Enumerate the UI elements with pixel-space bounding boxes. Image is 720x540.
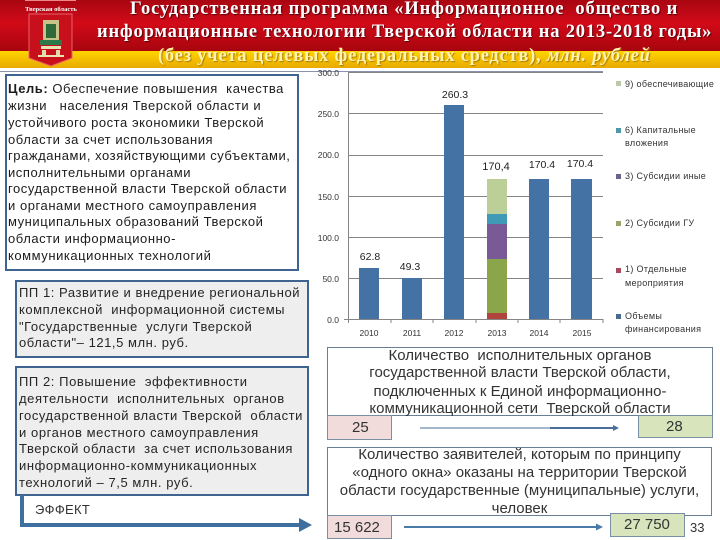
data labels: 260.3: [442, 89, 468, 101]
panel: subprogram 2: и органов местного самоуправления: [19, 425, 259, 440]
chart legend: 9) обеспечивающие: [625, 79, 714, 89]
panel: subprogram 2: Тверской области за счет использования: [19, 441, 293, 456]
panel: one-window applicants: человек: [492, 500, 547, 517]
label: effect: ЭФФЕКТ: [35, 502, 90, 517]
chart legend: вложения: [625, 138, 669, 148]
chart legend: 3) Субсидии иные: [625, 171, 706, 181]
chart legend: 1) Отдельные: [625, 264, 687, 274]
value: 25: [327, 415, 392, 440]
value: 15 622: 15 622: [334, 519, 380, 536]
data labels: [360, 89, 593, 273]
y axis labels: 50.0: [322, 274, 339, 284]
chart legend: 6) Капитальные: [625, 125, 696, 135]
panel: subprogram 2: государственной власти Тверской области: [19, 408, 303, 423]
title: [97, 0, 712, 66]
bar chart: funding by year: [318, 68, 604, 338]
data labels: 62.8: [360, 251, 380, 263]
icon: Tver region emblem: [25, 0, 77, 66]
panel: goal: области за счет использования: [8, 132, 213, 147]
panel: one-window applicants: Количество заявителей, которым по принципу: [358, 446, 681, 463]
panel: subprogram 2: информационно-коммуникационных: [19, 458, 257, 473]
panel: one-window applicants: «одного окна» оказаны на территории Тверской: [352, 464, 687, 481]
panel: goal: области информационно-: [8, 231, 176, 246]
x axis labels: [360, 328, 592, 338]
y axis labels: 250.0: [318, 109, 339, 119]
header banner: [0, 0, 720, 72]
panel: goal: [5, 74, 299, 271]
y axis labels: [318, 68, 339, 325]
panel: connected agencies: подключенных к Единой информационно-: [373, 383, 667, 400]
chart legend: 2) Субсидии ГУ: [625, 218, 694, 228]
x axis labels: 2012: [445, 328, 464, 338]
bars: [359, 105, 592, 319]
panel: goal: исполнительными органами: [8, 165, 191, 180]
panel: subprogram 1: комплексной информационной системы: [19, 302, 285, 317]
panel: connected agencies: государственной власти Тверской области,: [369, 364, 671, 381]
value: 28: [638, 415, 713, 438]
page number: 33: [690, 520, 704, 535]
x axis labels: 2013: [488, 328, 507, 338]
panel: one-window applicants: области государственные (муниципальные) услуги,: [340, 482, 699, 499]
data labels: 49.3: [400, 261, 420, 273]
x axis labels: 2015: [573, 328, 592, 338]
panel: subprogram 1: "Государственные услуги Тверской: [19, 319, 252, 334]
title: информационные технологии Тверской области на 2013-2018 годы»: [97, 22, 712, 42]
panel: connected agencies: Количество исполнительных органов: [389, 347, 651, 364]
value: 28: 28: [666, 418, 683, 435]
panel: goal: и органами местного самоуправления: [8, 198, 257, 213]
panel: connected agencies: [327, 347, 713, 416]
data labels: 170,4: [482, 161, 510, 173]
panel: subprogram 1: области"– 121,5 млн. руб.: [19, 335, 189, 350]
value: 27 750: [610, 513, 685, 537]
panel: goal: муниципальных образований Тверской: [8, 214, 263, 229]
value: 27 750: 27 750: [624, 516, 670, 533]
data labels: 170.4: [529, 159, 555, 171]
chart legend: Объемы: [625, 311, 662, 321]
panel: goal: гражданами, хозяйствующими субъектами,: [8, 148, 290, 163]
y axis labels: 200.0: [318, 150, 339, 160]
x axis labels: 2014: [530, 328, 549, 338]
panel: subprogram 2: технологий – 7,5 млн. руб.: [19, 475, 193, 490]
panel: goal: жизни населения Тверской области и: [8, 98, 261, 113]
y axis labels: 100.0: [318, 233, 339, 243]
panel: one-window applicants: [327, 447, 712, 516]
panel: goal: устойчивого роста экономики Тверской: [8, 115, 264, 130]
panel: connected agencies: коммуникационной сети Тверской области: [369, 400, 671, 417]
chart legend: финансирования: [625, 324, 701, 334]
arrow: 25 to 28: [420, 425, 619, 431]
chart legend: [616, 79, 714, 334]
x axis labels: 2011: [403, 328, 421, 338]
icon: Tver region emblem: Тверская область: [25, 6, 77, 13]
panel: goal: государственной власти Тверской области: [8, 181, 287, 196]
x axis labels: 2010: [360, 328, 379, 338]
panel: goal: коммуникационных технологий: [8, 248, 211, 263]
title: (без учета целевых федеральных средств), млн. рублей: [158, 46, 651, 66]
y axis labels: 0.0: [327, 315, 339, 325]
panel: subprogram 1: [15, 280, 309, 358]
arrow: effect: [20, 495, 312, 532]
y axis labels: 300.0: [318, 68, 339, 78]
stacked bar 2013: [487, 179, 507, 319]
panel: subprogram 2: [15, 366, 309, 496]
panel: subprogram 2: деятельности исполнительных органов: [19, 391, 285, 406]
value: 25: 25: [352, 419, 369, 436]
panel: subprogram 2: ПП 2: Повышение эффективности: [19, 374, 248, 389]
arrow: 15 622 to 27 750: [404, 524, 603, 530]
data labels: 170.4: [567, 158, 593, 170]
y axis labels: 150.0: [318, 192, 339, 202]
panel: subprogram 1: ПП 1: Развитие и внедрение региональной: [19, 285, 300, 300]
value: 15 622: [327, 515, 392, 539]
panel: goal: Цель: Обеспечение повышения качества: [8, 81, 284, 96]
chart legend: мероприятия: [625, 278, 684, 288]
